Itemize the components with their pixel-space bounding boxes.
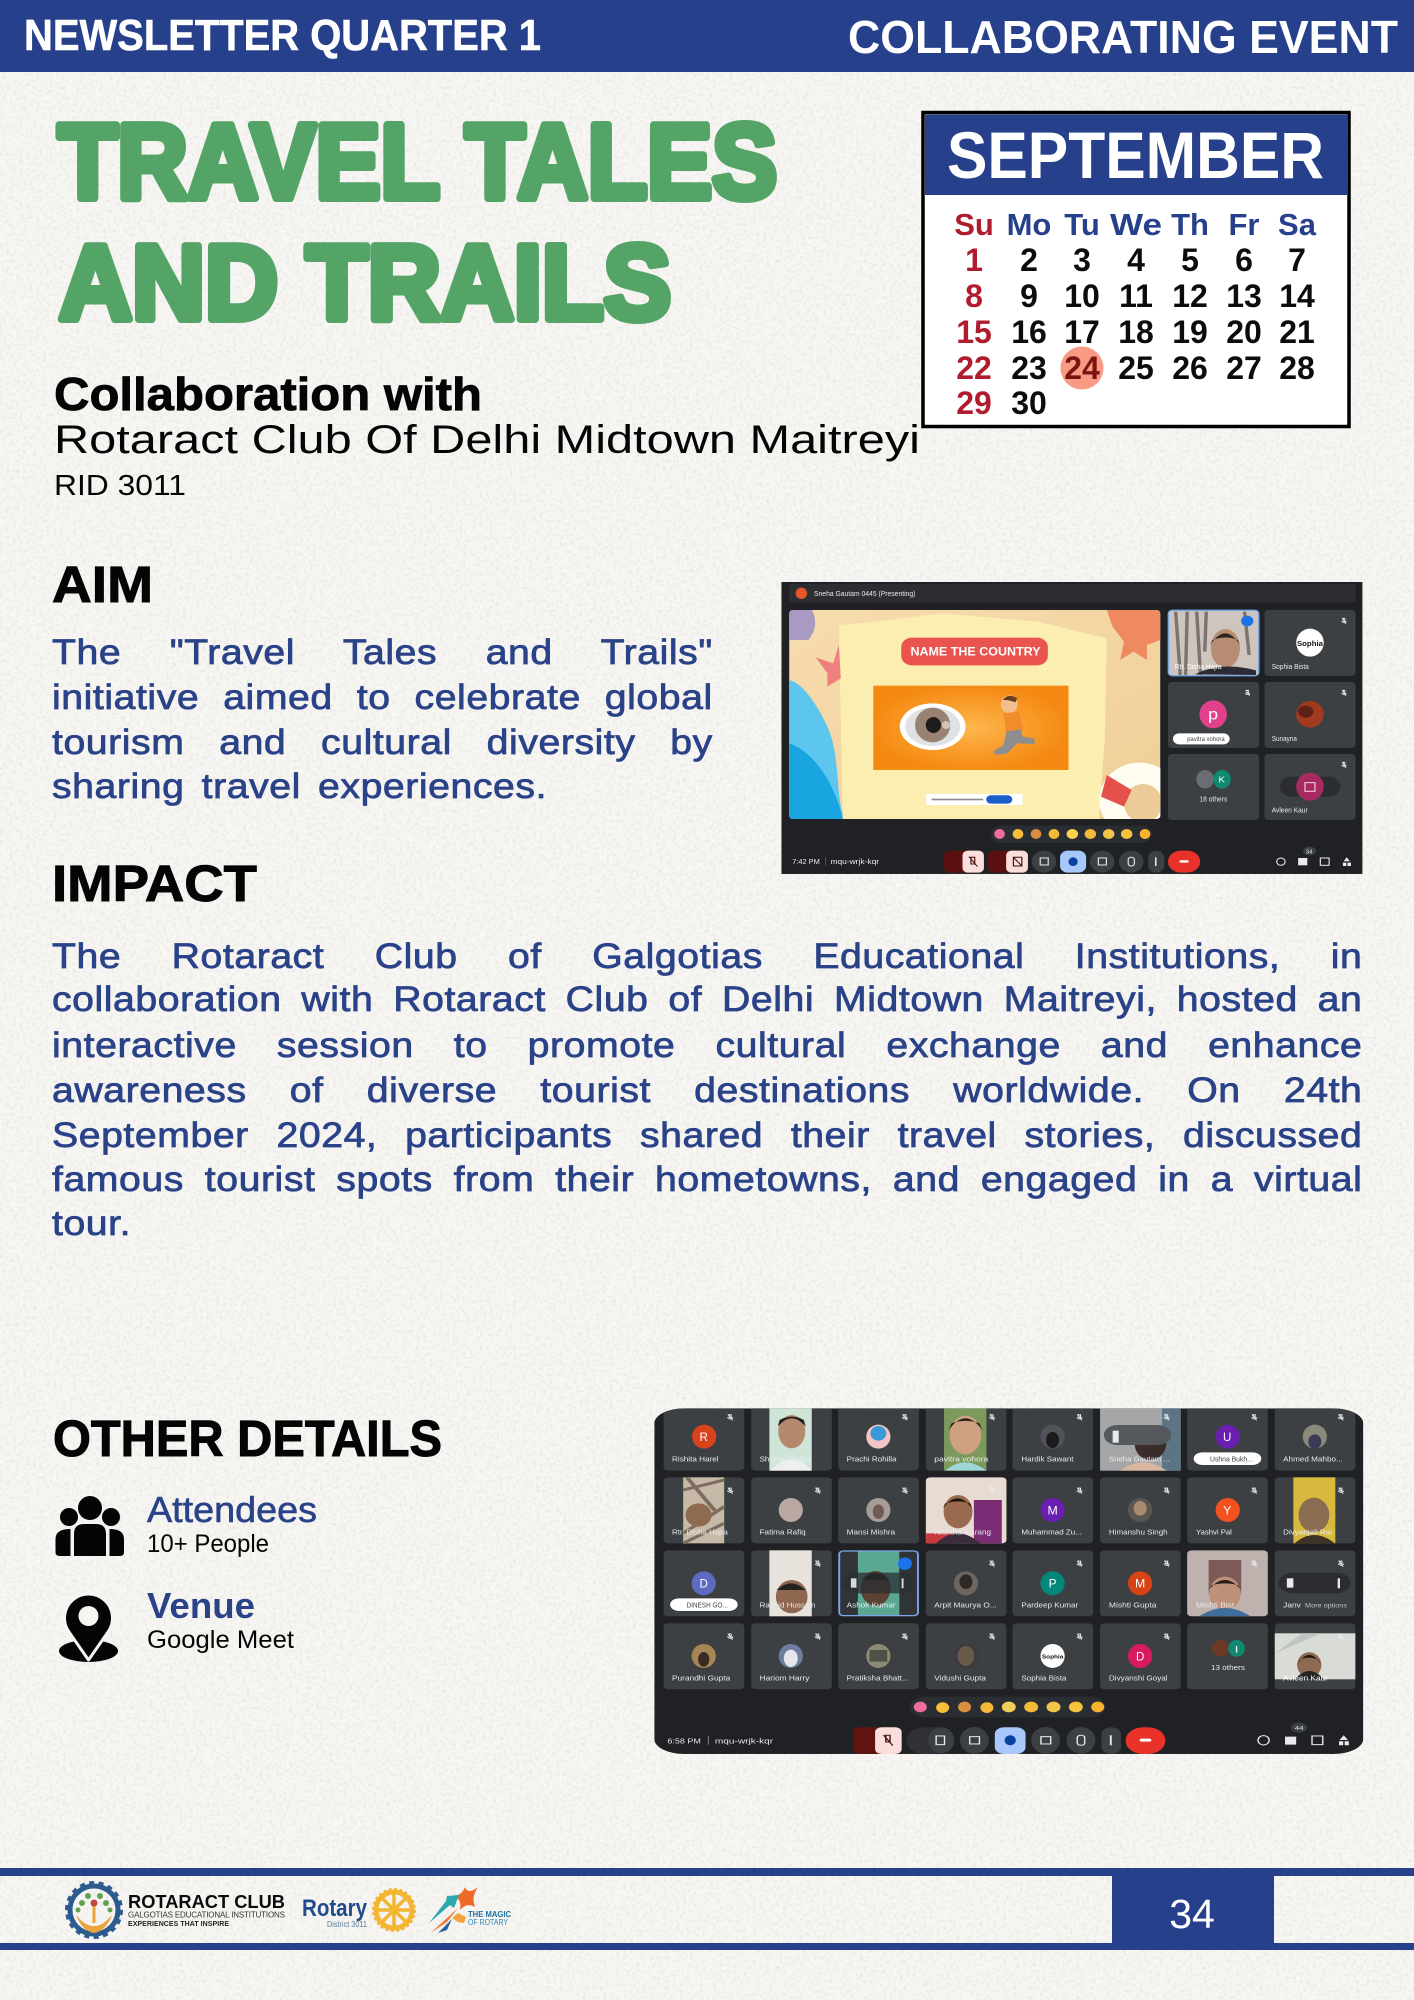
impact paragraph: interactive session to promote cultural exchange and enhance — [52, 1026, 1362, 1065]
meeting toolbar: mqu-wrjk-kqr — [830, 857, 879, 866]
calendar days: 2 — [1020, 242, 1038, 278]
participant names: Mansi Mishra — [847, 1528, 895, 1536]
participant names: Janv — [1283, 1601, 1302, 1609]
avatar letters: M — [1135, 1578, 1145, 1591]
page number box — [1112, 1876, 1274, 1943]
participant names: Sophia Bista — [1021, 1674, 1067, 1682]
participant names: Ushna Bukh... — [1210, 1455, 1253, 1463]
text: attendees: 10+ People — [147, 1530, 269, 1558]
participant names: Ashok Kumar — [847, 1601, 896, 1609]
participant names: Himanshu Singh — [1109, 1528, 1168, 1536]
calendar days: 22 — [956, 350, 992, 386]
calendar days: 29 — [956, 385, 992, 421]
participant names: Purandhi Gupta — [672, 1674, 731, 1682]
calendar days: 20 — [1226, 314, 1262, 350]
logo: the magic of rotary: OF ROTARY — [468, 1918, 509, 1927]
impact paragraph: The Rotaract Club of Galgotias Educational Institutions, in — [52, 937, 1362, 976]
aim paragraph: initiative aimed to celebrate global — [52, 678, 713, 717]
aim paragraph: The "Travel Tales and Trails" — [52, 633, 713, 672]
meeting toolbar — [792, 847, 1351, 873]
calendar days: We — [1110, 207, 1162, 242]
heading: impact: IMPACT — [52, 855, 257, 912]
impact paragraph: September 2024, participants shared their travel stories, discussed — [52, 1116, 1362, 1155]
title — [58, 103, 777, 342]
participant names: Divyanshi Goyal — [1109, 1674, 1168, 1682]
logo: the magic of rotary — [429, 1887, 511, 1933]
logo: rotary district: District 3011 — [327, 1920, 367, 1929]
screenshot: presentation meeting: Avleen Kaur — [1272, 806, 1308, 814]
calendar days: Su — [954, 207, 994, 242]
footer rules — [0, 1868, 1414, 1950]
logo: rotary district — [302, 1889, 415, 1931]
reaction emoji row — [910, 1697, 1105, 1717]
meeting toolbar: 44 — [1295, 1726, 1304, 1732]
header left text: NEWSLETTER QUARTER 1 — [24, 11, 541, 60]
icon: attendees — [56, 1496, 124, 1556]
calendar days: 28 — [1279, 350, 1315, 386]
calendar days: Mo — [1007, 207, 1051, 242]
participant names: Sheetal Thapa — [760, 1455, 812, 1463]
participant names: Muhammad Zu... — [1021, 1528, 1082, 1536]
participant tile backgrounds — [664, 1405, 1355, 1689]
logo: rotaract club: EXPERIENCES THAT INSPIRE — [128, 1921, 229, 1928]
avatar letters: D — [699, 1578, 708, 1591]
text: venue: Google Meet — [147, 1626, 294, 1654]
calendar days: 1 — [965, 242, 983, 278]
screenshot: presentation meeting: pavitra vohora — [1187, 735, 1225, 743]
participant names: 13 others — [1211, 1663, 1245, 1672]
calendar days: 10 — [1064, 278, 1100, 314]
calendar days: 26 — [1172, 350, 1208, 386]
avatar letters: M — [1047, 1504, 1058, 1518]
impact paragraph: tour. — [52, 1204, 131, 1243]
meeting toolbar — [667, 1723, 1349, 1754]
impact paragraph: famous tourist spots from their hometowns, and engaged in a virtual — [52, 1160, 1362, 1199]
calendar days: 24 — [1064, 350, 1100, 386]
calendar days: 9 — [1020, 278, 1038, 314]
calendar days: Sa — [1278, 207, 1317, 242]
participant names: Rishita Harel — [672, 1455, 719, 1463]
calendar month: SEPTEMBER — [947, 118, 1324, 192]
participant names: Rtr. Disha Hajra — [672, 1528, 728, 1536]
avatar letters: U — [1223, 1431, 1231, 1444]
avatar letters: R — [699, 1431, 708, 1444]
mute indicators — [727, 1414, 1344, 1640]
screenshot: presentation meeting: Sunayna — [1272, 734, 1298, 743]
participant names: Vidushi Gupta — [934, 1674, 986, 1682]
calendar days: 8 — [965, 278, 983, 314]
meeting toolbar: 6:58 PM — [667, 1737, 701, 1745]
screenshot: participant grid — [654, 1405, 1363, 1754]
calendar days: Tu — [1064, 207, 1100, 242]
heading: other details: OTHER DETAILS — [53, 1410, 442, 1467]
logo: rotaract club: GALGOTIAS EDUCATIONAL INSTITUTIONS — [128, 1910, 285, 1920]
logo: rotary district: Rotary — [302, 1895, 368, 1922]
text: venue — [147, 1585, 294, 1654]
impact paragraph: awareness of diverse tourist destinations worldwide. On 24th — [52, 1071, 1362, 1110]
heading: aim: AIM — [52, 556, 153, 613]
calendar days — [954, 207, 1317, 421]
impact paragraph: collaboration with Rotaract Club of Delhi Midtown Maitreyi, hosted an — [52, 980, 1362, 1019]
participant names: pavitra vohora — [934, 1455, 989, 1463]
screenshot: presentation meeting: 18 others — [1199, 795, 1228, 804]
avatar letters: D — [1136, 1650, 1144, 1664]
calendar days: 7 — [1288, 242, 1306, 278]
participant names: Yashvi Pal — [1196, 1528, 1232, 1536]
logo: the magic of rotary: THE MAGIC — [468, 1910, 511, 1919]
title: AND TRAILS — [59, 224, 671, 342]
collaboration block — [54, 368, 920, 502]
text: venue: Venue — [147, 1585, 255, 1626]
calendar days: 23 — [1011, 350, 1047, 386]
header bar — [0, 0, 1414, 72]
calendar days: 14 — [1279, 278, 1315, 314]
participant names: Pratiksha Bhatt... — [847, 1674, 909, 1682]
logo: rotaract club: ROTARACT CLUB — [128, 1892, 285, 1912]
screenshot: presentation meeting: Sneha Gautam 0445 (Presenting) — [814, 589, 916, 598]
aim paragraph: tourism and cultural diversity by — [52, 723, 713, 762]
collaboration block: Collaboration with — [54, 368, 482, 420]
participant names: Mishti Bist — [1196, 1601, 1235, 1609]
aim paragraph: sharing travel experiences. — [52, 767, 547, 806]
participant names: Prachi Rohilla — [847, 1455, 897, 1463]
meeting toolbar: 7:42 PM — [792, 857, 820, 866]
header right text: COLLABORATING EVENT — [848, 11, 1398, 63]
participant names: Pardeep Kumar — [1021, 1601, 1078, 1609]
avatar letters: Sophia — [1042, 1655, 1064, 1660]
logo: rotaract club — [67, 1883, 285, 1937]
highlighted date — [1060, 346, 1104, 390]
screenshot: presentation meeting — [781, 582, 1362, 874]
calendar days: 4 — [1127, 242, 1145, 278]
participant names: Hariom Harry — [760, 1674, 810, 1682]
text: attendees: Attendees — [147, 1489, 317, 1530]
avatar letters: Y — [1223, 1504, 1232, 1518]
reaction emoji row — [991, 826, 1152, 843]
calendar days: 25 — [1118, 350, 1154, 386]
video feeds — [683, 1408, 1355, 1679]
calendar days: 15 — [956, 314, 992, 350]
participant names: Fatima Rafiq — [760, 1528, 806, 1536]
participant names: Avleen Kaur — [1283, 1674, 1328, 1682]
calendar days: 16 — [1011, 314, 1047, 350]
screenshot: presentation meeting: Sophia Bista — [1272, 662, 1310, 671]
meeting toolbar: 34 — [1306, 850, 1313, 855]
calendar days: 19 — [1172, 314, 1208, 350]
avatars — [692, 1425, 1327, 1668]
participant names: Arpit Maurya O... — [934, 1601, 997, 1609]
calendar days: 3 — [1073, 242, 1091, 278]
screenshot: presentation meeting: p — [1208, 706, 1218, 723]
calendar days: 6 — [1235, 242, 1253, 278]
participant names: Ahmed Mahbo... — [1283, 1455, 1343, 1463]
shared slide: NAME THE COUNTRY — [910, 645, 1041, 658]
title: TRAVEL TALES — [58, 103, 777, 221]
collaboration block: RID 3011 — [54, 470, 186, 502]
screenshot: presentation meeting: Sophia — [1297, 639, 1324, 648]
panel: calendar — [923, 112, 1349, 426]
participant names — [672, 1455, 1347, 1682]
collaboration block: Rotaract Club Of Delhi Midtown Maitreyi — [54, 418, 920, 462]
white name pills and hover controls — [670, 1431, 1351, 1611]
participant tiles — [1168, 610, 1356, 820]
participant names: Hardik Sawant — [1021, 1455, 1074, 1463]
participant names: Divyanjali Rai — [1283, 1528, 1332, 1536]
page number box: 34 — [1169, 1891, 1215, 1937]
meeting toolbar: mqu-wrjk-kqr — [715, 1737, 773, 1745]
calendar days: 27 — [1226, 350, 1262, 386]
calendar days: 21 — [1279, 314, 1315, 350]
participant names: Rashid Hussain — [760, 1601, 816, 1609]
calendar days: Fr — [1228, 207, 1260, 242]
calendar days: 11 — [1119, 278, 1153, 314]
participant names: Mishti Gupta — [1109, 1601, 1157, 1609]
screenshot: presentation meeting: K — [1219, 775, 1226, 785]
screenshot: presentation meeting: Rtr. Disha Hajra — [1175, 662, 1222, 671]
participant names: Nishtha Narang — [934, 1528, 991, 1536]
calendar days: 13 — [1226, 278, 1262, 314]
avatar letters — [699, 1431, 1238, 1664]
calendar days: Th — [1171, 207, 1209, 242]
shared slide — [789, 610, 1160, 819]
calendar days: 30 — [1011, 385, 1047, 421]
participant names: DINESH GO... — [686, 1601, 728, 1609]
aim paragraph — [52, 633, 713, 806]
impact paragraph — [52, 937, 1362, 1243]
text: attendees — [147, 1489, 317, 1558]
participant names: Sneha Gautam ... — [1109, 1455, 1170, 1463]
calendar days: 17 — [1064, 314, 1100, 350]
calendar days: 5 — [1181, 242, 1199, 278]
calendar days: 18 — [1118, 314, 1154, 350]
calendar days: 12 — [1172, 278, 1208, 314]
avatar letters: P — [1049, 1578, 1057, 1591]
participant names: More options — [1305, 1602, 1347, 1609]
icon: venue pin — [59, 1594, 118, 1662]
avatar letters: I — [1235, 1645, 1238, 1655]
